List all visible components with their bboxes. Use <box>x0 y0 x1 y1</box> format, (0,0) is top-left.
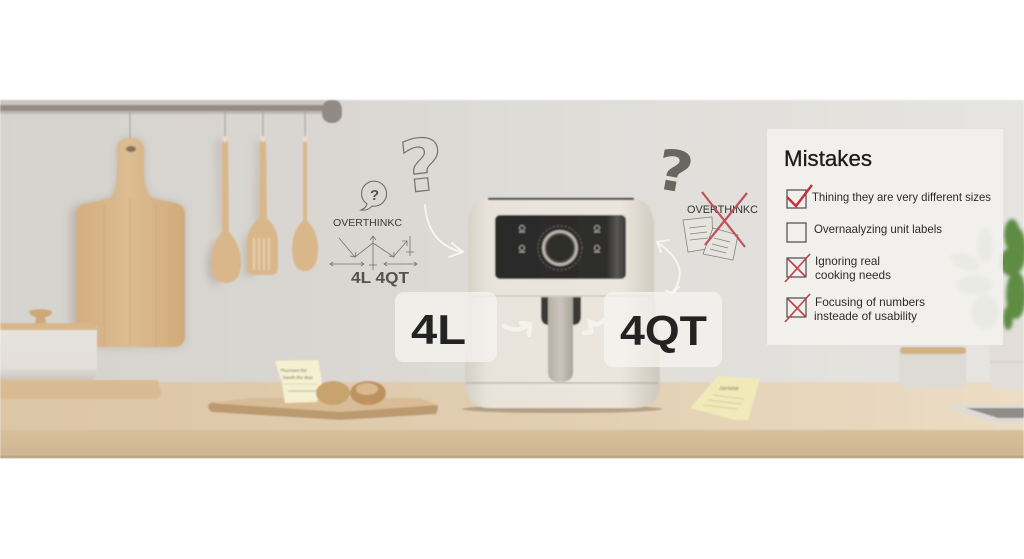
basket handle <box>541 297 581 382</box>
kitchen background scene <box>0 100 1024 458</box>
curved double arrow <box>657 240 680 293</box>
counter top <box>0 382 1024 432</box>
food board <box>208 398 438 420</box>
hanging rail <box>0 100 342 123</box>
4L label tile <box>395 292 497 362</box>
dark question mark: ? <box>651 137 698 208</box>
item 2: empty: Overnaalyzing unit labels <box>814 222 942 236</box>
wooden spoon <box>206 136 241 286</box>
item 3: crossed: Ignoring real <box>815 254 880 268</box>
hooks <box>130 110 305 140</box>
speech bubble with question mark: ? <box>370 187 379 204</box>
red cross <box>702 192 747 247</box>
wooden cutting board <box>70 138 185 347</box>
overthinking label: OVERTHINKC <box>687 204 758 216</box>
slotted spatula <box>244 136 278 276</box>
paper sheets <box>683 217 738 260</box>
4L 4QT small label: 4L 4QT <box>351 270 409 287</box>
item 3: crossed <box>785 254 891 282</box>
counter front edge <box>0 430 1024 458</box>
fryer body <box>465 198 660 408</box>
sticky note on counter <box>690 376 760 420</box>
4L label tile: 4L <box>411 306 466 353</box>
pot with lid <box>0 309 97 381</box>
overthinking sketch <box>330 181 417 287</box>
canister <box>899 347 966 388</box>
shadow under fryer <box>462 405 662 413</box>
large outlined question mark: ? <box>396 122 448 210</box>
arrow: 4QT to fryer <box>584 320 605 333</box>
item 4: crossed: Focusing of numbers <box>815 295 925 309</box>
bread rolls <box>316 381 386 405</box>
small board under pot <box>0 380 162 399</box>
item 4: crossed <box>785 294 925 323</box>
crossed-out overthinking sketch <box>683 192 758 260</box>
item 4: crossed: insteade of usability <box>814 309 917 323</box>
4QT label tile: 4QT <box>620 307 707 354</box>
air fryer <box>462 198 662 413</box>
item 1: checked: Thining they are very different sizes <box>812 190 991 204</box>
4QT label tile <box>604 292 722 367</box>
sticky note on board <box>275 360 322 403</box>
wall <box>0 100 1024 385</box>
arrow: 4L to fryer <box>504 323 530 335</box>
sticky note on board: hands the dear <box>283 375 314 380</box>
curved white arrow to fryer <box>425 205 463 257</box>
dial <box>538 226 582 270</box>
sticky note on counter: Jatriwtak <box>718 386 739 392</box>
item 3: crossed: cooking needs <box>815 268 891 282</box>
plant <box>947 219 1024 330</box>
tablet <box>946 405 1024 423</box>
panel: mistakes <box>767 129 1003 345</box>
overthinking label: OVERTHINKC <box>333 217 402 229</box>
wooden ladle <box>292 136 318 271</box>
arrow scribbles <box>330 236 417 270</box>
panel icons <box>519 226 600 252</box>
vase <box>990 320 1024 390</box>
sticky note on board: Thurmont the <box>280 368 307 373</box>
item 2: empty <box>787 222 942 242</box>
heading: Mistakes <box>784 146 872 171</box>
control panel <box>495 215 626 279</box>
item 1: checked <box>787 185 991 208</box>
